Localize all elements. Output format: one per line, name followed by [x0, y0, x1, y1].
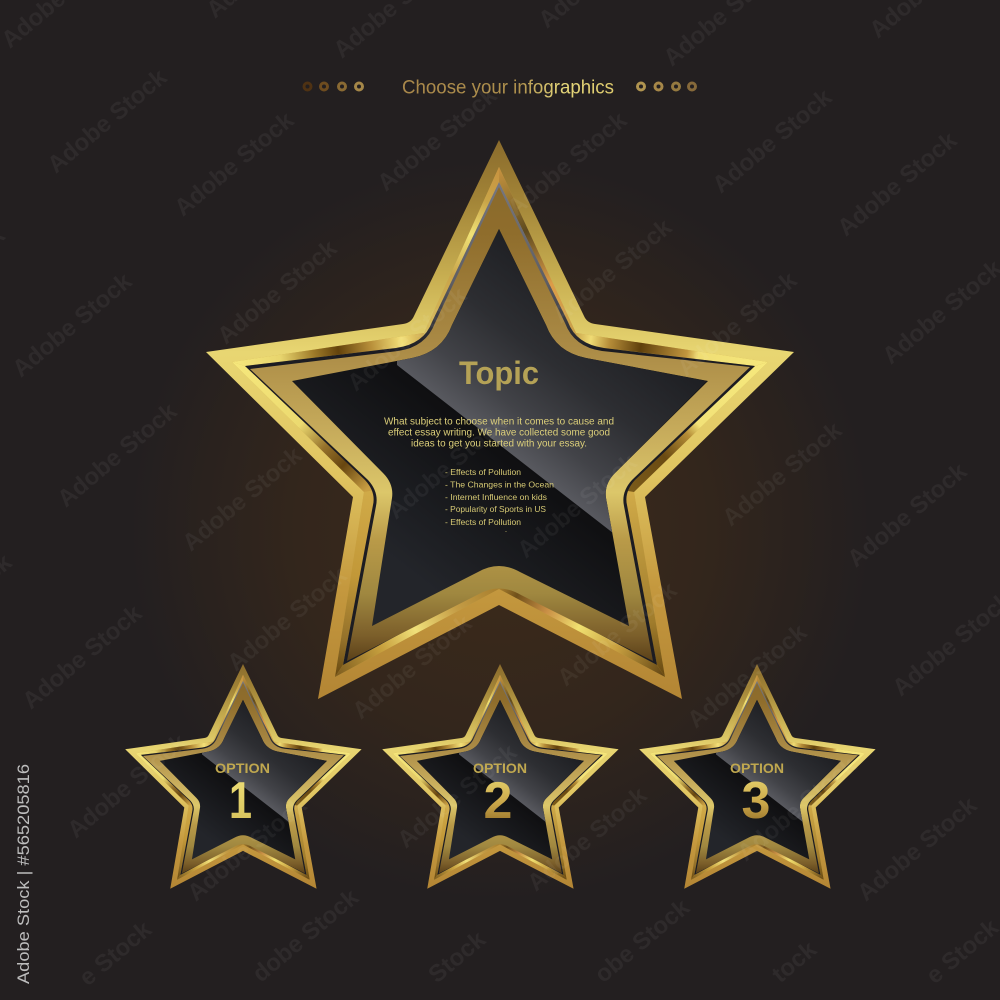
option 1 number: 1	[229, 772, 252, 830]
watermark pattern: Adobe Stock	[852, 791, 983, 907]
watermark pattern: Stock	[423, 925, 491, 989]
main star intro paragraph	[384, 416, 614, 450]
watermark pattern: Adobe Stock	[732, 751, 863, 867]
watermark pattern: Adobe Stock	[17, 599, 148, 715]
watermark pattern: tock	[767, 936, 822, 988]
main star topic list: .	[505, 524, 507, 534]
watermark pattern: Adobe Stock	[547, 213, 678, 329]
main star intro paragraph: effect essay writing. We have collected some good	[388, 428, 610, 438]
watermark pattern: Adobe Stock	[382, 409, 513, 525]
main star topic list: - Popularity of Sports in US	[445, 504, 546, 514]
option 2 label: OPTION	[473, 761, 527, 776]
option 2 number: 2	[484, 772, 512, 830]
side credit: Adobe Stock id: Adobe Stock | #565205816	[15, 764, 33, 984]
watermark pattern: Adobe Stock	[672, 266, 803, 382]
watermark pattern: Adobe Stock	[222, 561, 353, 677]
watermark pattern: e Stock	[74, 915, 157, 991]
watermark pattern: Adobe Stock	[522, 781, 653, 897]
main star topic list: - Internet Influence on kids	[445, 492, 547, 502]
option 1 frame	[125, 664, 362, 889]
option 3 frame	[639, 664, 876, 889]
watermark pattern: Adobe Stock	[842, 457, 973, 573]
watermark pattern: Adobe Stock	[212, 234, 343, 350]
panel: option 1 star	[125, 664, 362, 889]
main star heading: Topic: Topic	[459, 355, 539, 391]
main star topic list: - The Changes in the Ocean	[445, 480, 554, 490]
watermark pattern: Adobe Stock	[832, 126, 963, 242]
watermark pattern: Adobe Stock	[177, 441, 308, 557]
main star topic list: - Effects of Pollution	[445, 517, 521, 527]
watermark pattern: Adobe Stock	[512, 448, 643, 564]
watermark pattern: Adobe Stock	[342, 281, 473, 397]
watermark pattern: Adobe Stock	[347, 609, 478, 725]
main star topic list	[445, 467, 554, 534]
background glow	[100, 150, 900, 910]
main star topic list: - Effects of Pollution	[445, 467, 521, 477]
panel: main star	[206, 140, 794, 699]
main star intro paragraph: What subject to choose when it comes to cause and	[384, 416, 614, 428]
watermark pattern: Adobe Stock	[169, 106, 300, 222]
watermark pattern: Adobe Stock	[52, 397, 183, 513]
watermark pattern: Adobe Stock	[62, 728, 193, 844]
panel: option 2 star	[382, 664, 619, 889]
header title: Choose your infographics	[402, 76, 614, 98]
watermark pattern: Adobe Stock	[552, 576, 683, 692]
main star frame	[206, 140, 794, 699]
header: choose your infographics	[304, 76, 696, 98]
panel: option 3 star	[639, 664, 876, 889]
right ring dots	[638, 83, 696, 90]
option 2 frame	[382, 664, 619, 889]
option 3 label: OPTION	[730, 761, 784, 776]
watermark pattern: Adobe Stock	[392, 738, 523, 854]
option 3 number: 3	[742, 772, 770, 830]
watermark pattern: Adobe Stock	[707, 83, 838, 199]
watermark pattern: Adobe Stock	[502, 106, 633, 222]
left ring dots	[304, 83, 362, 90]
watermark pattern: obe Stock	[590, 894, 695, 988]
option 1 label: OPTION	[215, 761, 270, 776]
watermark pattern: Adobe Stock	[372, 81, 503, 197]
watermark pattern: dobe Stock	[247, 883, 364, 988]
watermark pattern: Adobe Stock	[682, 618, 813, 734]
watermark pattern: Adobe Stock	[182, 791, 313, 907]
main star intro paragraph: ideas to get you started with your essay.	[411, 438, 587, 450]
watermark pattern: Adobe Stock	[717, 416, 848, 532]
watermark pattern: Adobe Stock	[42, 63, 173, 179]
watermark pattern: Adobe Stock	[7, 267, 138, 383]
